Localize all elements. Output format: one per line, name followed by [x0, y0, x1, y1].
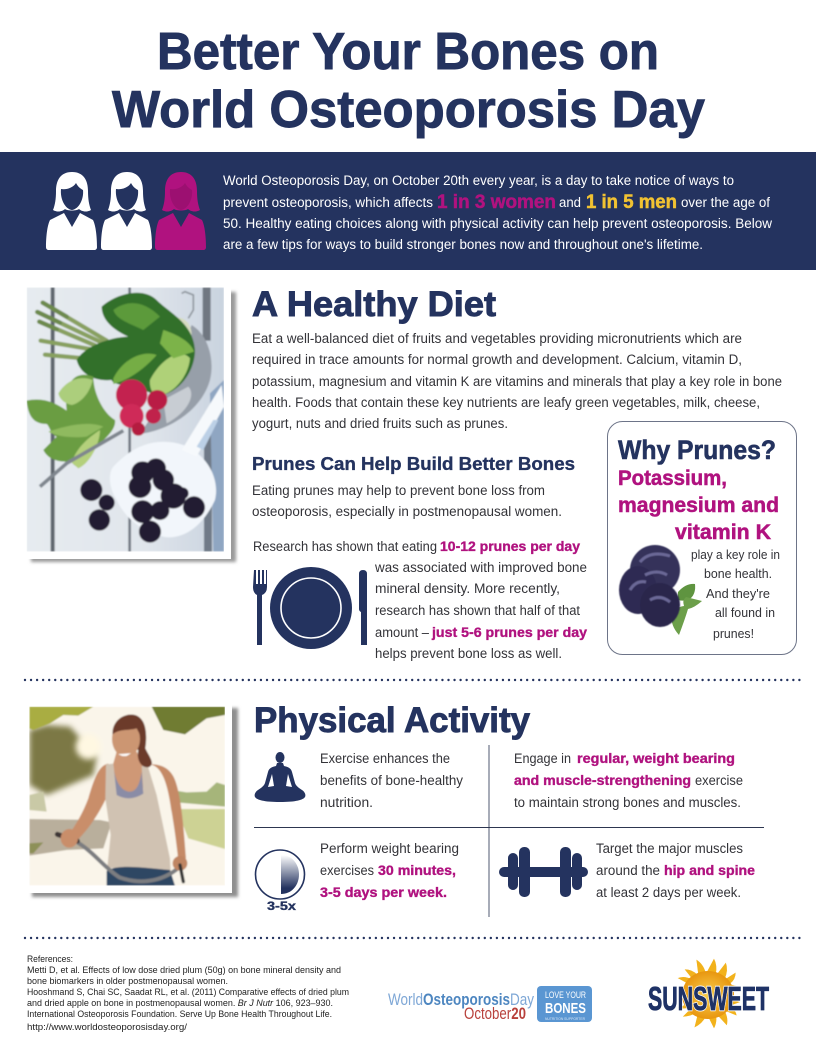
logo: world osteoporosis day — [388, 986, 592, 1023]
text block: references: and dried apple on bone in postmenopausal women. Br J Nutr 106, 923–930. — [27, 998, 333, 1008]
text block: research — [253, 539, 588, 661]
divider: dotted line — [25, 679, 803, 681]
text block: target muscles — [596, 841, 756, 900]
intro text: World Osteoporosis Day, on October 20th every year, is a day to take notice of ways to — [223, 173, 734, 188]
intro text: are a few tips for ways to build stronger bones now and throughout one's lifetime. — [223, 237, 703, 252]
colander — [140, 325, 212, 434]
panel: why prunes: bone health. — [704, 567, 772, 581]
text block: engage: and muscle-strengthening — [514, 773, 691, 788]
intro text: 50. Healthy eating choices along with physical activity can help prevent osteoporosis. Below — [223, 216, 772, 231]
panel: why prunes: prunes! — [713, 627, 754, 641]
text block: references: References: — [27, 954, 73, 964]
handle — [40, 431, 123, 487]
prunes — [80, 458, 205, 543]
intro text — [223, 173, 772, 252]
title — [112, 23, 705, 139]
text block: references: Metti D, et al. Effects of low dose dried plum (50g) on bone mineral density and — [27, 965, 341, 975]
text block: references: Hooshmand S, Chai SC, Saadat RL, et al. (2011) Comparative effects of dried plum — [27, 987, 349, 997]
logo: sunsweet — [648, 958, 769, 1029]
title: Better Your Bones on — [157, 23, 659, 81]
logo: world osteoporosis day: WorldOsteoporosisDay — [388, 990, 534, 1009]
text block: engage: exercise — [695, 773, 743, 788]
intro text: and — [559, 195, 581, 210]
icon: prunes with leaves — [619, 545, 702, 635]
text block: exercise enhances: Exercise enhances the — [320, 751, 450, 766]
text block: diet intro: health. Foods that contain these key nutrients are leafy green vegetables, milk, cheese, — [252, 395, 760, 410]
text block: research: was associated with improved bone — [374, 560, 587, 575]
text block: diet intro: Eat a well-balanced diet of fruits and vegetables providing micronutrients which are — [252, 331, 742, 346]
logo: world osteoporosis day: NUTRITION SUPPORTER — [545, 1017, 585, 1021]
panel: why prunes — [608, 422, 796, 654]
text block: references — [27, 954, 349, 1032]
text block: research: helps prevent bone loss as well. — [375, 646, 562, 661]
intro text: 1 in 5 men — [586, 191, 677, 213]
icon: plate and cutlery — [253, 567, 367, 649]
text block: research: mineral density. More recently, — [375, 581, 560, 596]
text block: engage: Engage in — [514, 751, 571, 766]
panel: intro banner — [0, 152, 816, 270]
text block: engage: to maintain strong bones and muscles. — [514, 795, 741, 810]
icon: meditation figure — [255, 752, 305, 802]
text block: diet intro: potassium, magnesium and vitamin K are vitamins and minerals that play a key role in bone — [252, 374, 782, 389]
panel: why prunes: magnesium and — [618, 494, 779, 517]
heading: prunes can help: Prunes Can Help Build Better Bones — [252, 453, 575, 474]
text block: eating prunes — [252, 483, 562, 519]
text block: target muscles: hip and spine — [664, 863, 756, 878]
logo: world osteoporosis day: BONES — [545, 1000, 586, 1017]
icon: dumbbell — [499, 847, 588, 897]
text block: exercise enhances: nutrition. — [320, 795, 373, 810]
panel: why prunes: vitamin K — [675, 521, 771, 544]
text block: engage: regular, weight bearing — [577, 751, 735, 766]
text block: references: bone biomarkers in older postmenopausal women. — [27, 976, 228, 986]
icon: 3-5x clock: 3-5x — [267, 899, 296, 913]
divider: dotted line — [25, 937, 803, 939]
text block: research: research has shown that half of that — [375, 603, 580, 618]
text block: weight bearing: exercises — [320, 863, 374, 878]
text block: weight bearing — [320, 841, 459, 900]
panel: why prunes: play a key role in — [691, 548, 780, 562]
text block: eating prunes: Eating prunes may help to prevent bone loss from — [252, 483, 545, 498]
text block: research: amount – — [375, 625, 429, 640]
icon: three women — [46, 172, 206, 250]
text block: references: International Osteoporosis Foundation. Serve Up Bone Health Throughout Life. — [27, 1009, 332, 1019]
intro text: over the age of — [681, 195, 770, 210]
text block: research: Research has shown that eating — [253, 539, 437, 554]
panel: healthy diet photo — [24, 284, 236, 562]
text block: target muscles: around the — [596, 863, 660, 878]
panel: why prunes: And they're — [706, 587, 770, 601]
woman — [68, 764, 108, 840]
text block: references: http://www.worldosteoporosisday.org/ — [27, 1022, 188, 1032]
heading: physical activity: Physical Activity — [254, 701, 531, 740]
text block: weight bearing: Perform weight bearing — [320, 841, 459, 856]
logo: world osteoporosis day: October20 — [464, 1004, 526, 1023]
asparagus — [37, 303, 107, 358]
intro text: 1 in 3 women — [437, 191, 556, 213]
text block: weight bearing: 3-5 days per week. — [320, 885, 447, 900]
text block: diet intro: yogurt, nuts and dried fruits such as prunes. — [252, 416, 508, 431]
text block: target muscles: at least 2 days per week. — [596, 885, 741, 900]
plate — [110, 442, 216, 537]
panel: why prunes: Why Prunes? — [618, 435, 776, 465]
radishes — [116, 379, 147, 411]
text block: eating prunes: osteoporosis, especially in postmenopausal women. — [252, 504, 562, 519]
panel: why prunes: Potassium, — [618, 467, 727, 490]
heading: a healthy diet: A Healthy Diet — [252, 285, 496, 324]
icon: 3-5x clock — [256, 850, 304, 913]
title: World Osteoporosis Day — [112, 81, 705, 139]
greens — [77, 293, 195, 396]
grid dividers — [254, 745, 764, 917]
text block: target muscles: Target the major muscles — [596, 841, 743, 856]
text block: diet intro: required in trace amounts for normal growth and development. Calcium, vitamin D, — [252, 352, 742, 367]
panel: why prunes: all found in — [715, 606, 775, 620]
panel: physical activity photo — [25, 703, 238, 897]
logo: world osteoporosis day: LOVE YOUR — [545, 990, 586, 1000]
text block: exercise enhances — [320, 751, 463, 810]
text block: diet intro — [252, 331, 782, 431]
text block: exercise enhances: benefits of bone-healthy — [320, 773, 463, 788]
text block: weight bearing: 30 minutes, — [378, 863, 456, 878]
text block: research: just 5-6 prunes per day — [431, 625, 588, 640]
intro text: prevent osteoporosis, which affects — [223, 195, 433, 210]
text block: research: 10-12 prunes per day — [440, 539, 581, 554]
text block: engage — [514, 751, 743, 810]
